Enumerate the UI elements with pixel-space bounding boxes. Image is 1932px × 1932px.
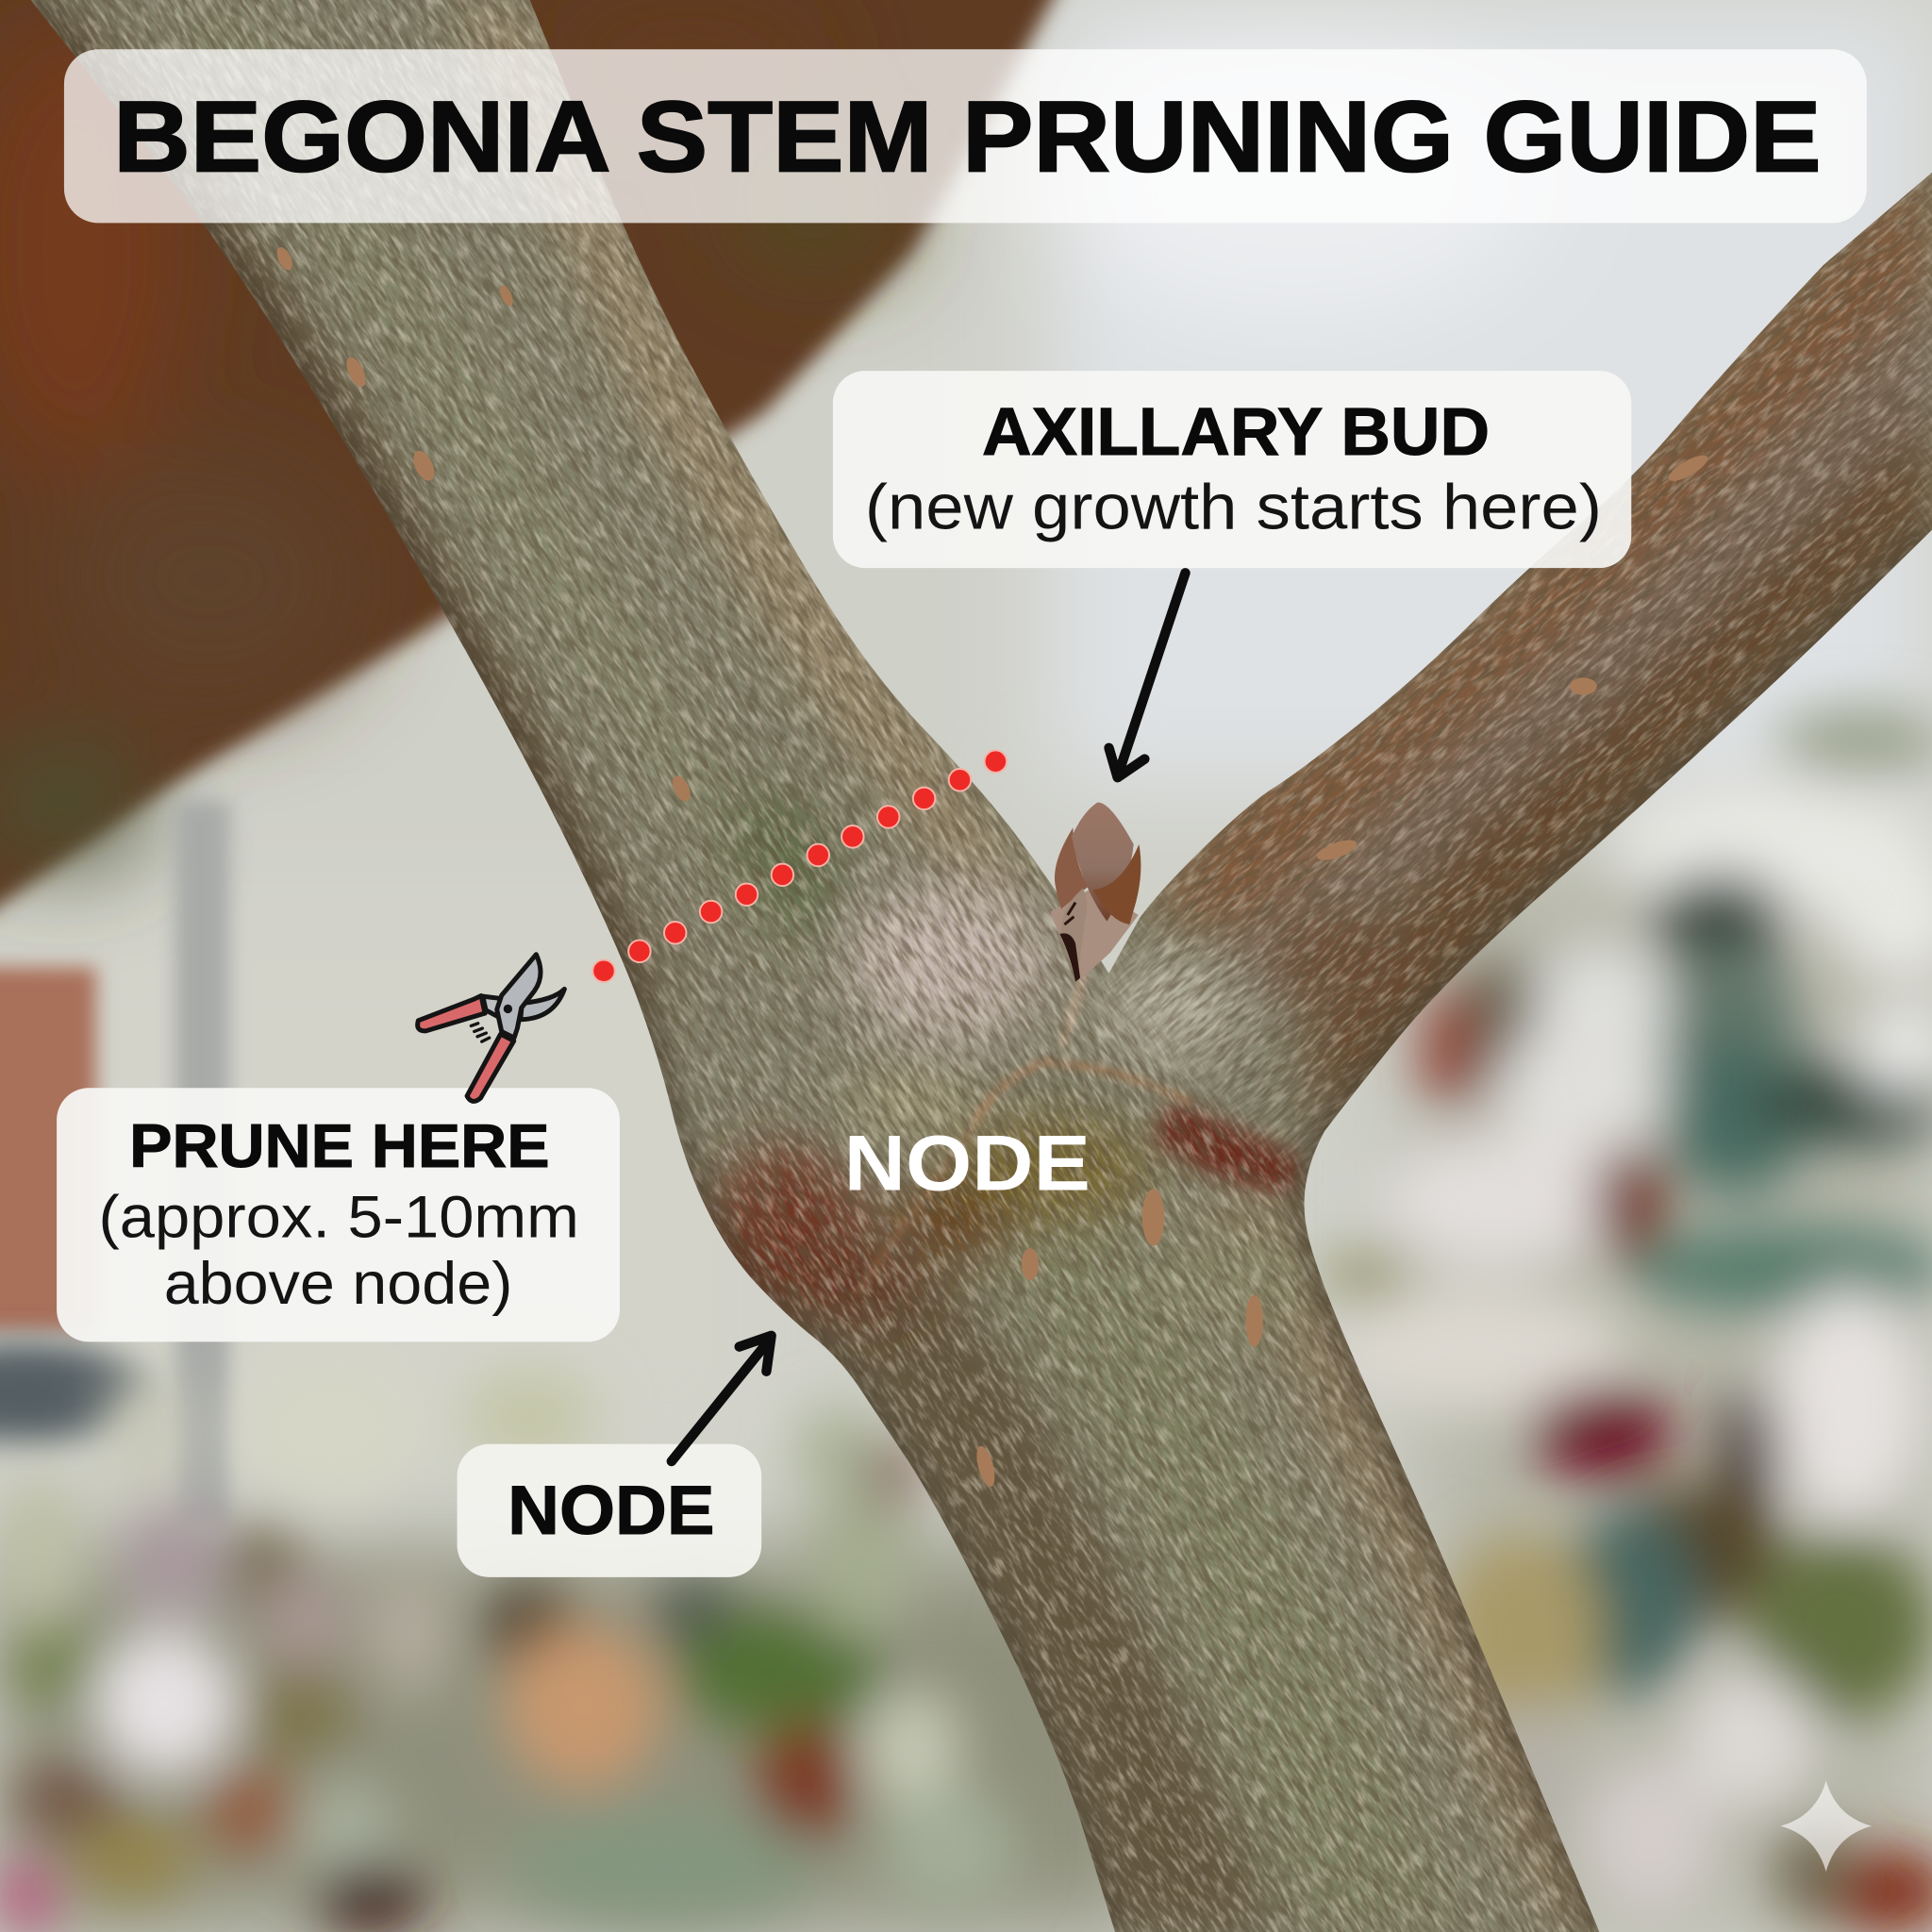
label: node on stem: NODE — [844, 1119, 1091, 1208]
callout: prune here: PRUNE HERE — [129, 1111, 550, 1180]
callout: prune here — [57, 1088, 620, 1341]
callout: node: NODE — [508, 1473, 715, 1549]
dotted cut line — [592, 750, 1007, 982]
callout: prune here: (approx. 5-10mm — [98, 1184, 579, 1250]
icon: pruning shears — [418, 955, 564, 1101]
callout: node — [458, 1444, 761, 1577]
callout: prune here: above node) — [164, 1251, 512, 1317]
lenticel spots — [274, 245, 1711, 1489]
right garden — [1775, 708, 1932, 776]
icon: sparkle watermark — [1780, 1780, 1872, 1872]
callout: axillary bud: (new growth starts here) — [865, 472, 1602, 542]
title banner: BEGONIA STEM PRUNING GUIDE — [113, 80, 1821, 193]
icon: axillary bud — [1050, 803, 1141, 982]
node colouring — [707, 766, 1417, 1331]
arrow: to node — [672, 1336, 772, 1461]
callout: axillary bud — [833, 371, 1631, 568]
left / bottom garden — [106, 1368, 185, 1503]
callout: axillary bud: AXILLARY BUD — [982, 394, 1490, 470]
node ring — [1152, 1103, 1301, 1192]
arrow: to axillary bud — [1109, 573, 1185, 777]
title banner — [64, 49, 1867, 223]
